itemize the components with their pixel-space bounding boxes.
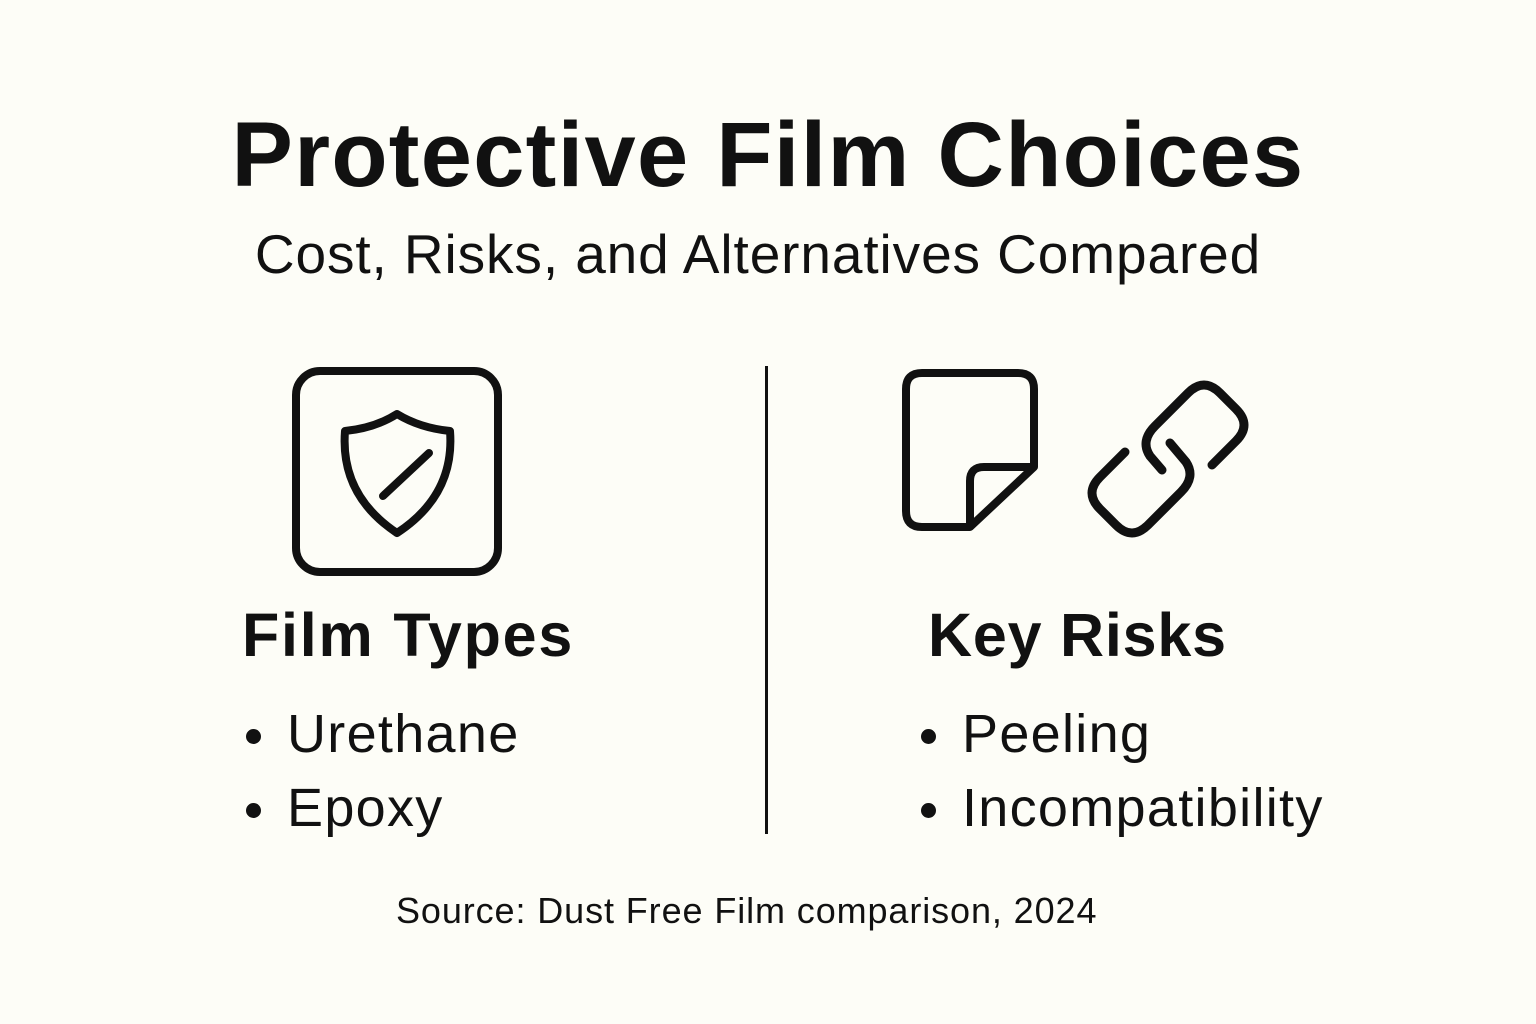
icon: chain link	[1088, 380, 1248, 538]
list: key risks: Incompatibility	[962, 778, 1324, 838]
source: Source: Dust Free Film comparison, 2024	[396, 890, 1097, 931]
divider	[765, 366, 768, 834]
list: film types: Urethane	[287, 704, 520, 764]
icon: peeling sheet	[902, 369, 1038, 531]
list: key risks: Peeling	[962, 704, 1151, 764]
list: film types: Epoxy	[287, 778, 444, 838]
heading: film types: Film Types	[242, 601, 574, 669]
list: film types	[246, 704, 520, 838]
heading: key risks: Key Risks	[928, 601, 1227, 669]
title: Protective Film Choices	[232, 104, 1304, 206]
subtitle: Cost, Risks, and Alternatives Compared	[255, 223, 1261, 285]
panel: film types	[242, 367, 574, 838]
panel: key risks	[902, 369, 1324, 838]
icon: shield in rounded square	[292, 367, 502, 576]
list: key risks	[921, 704, 1324, 838]
